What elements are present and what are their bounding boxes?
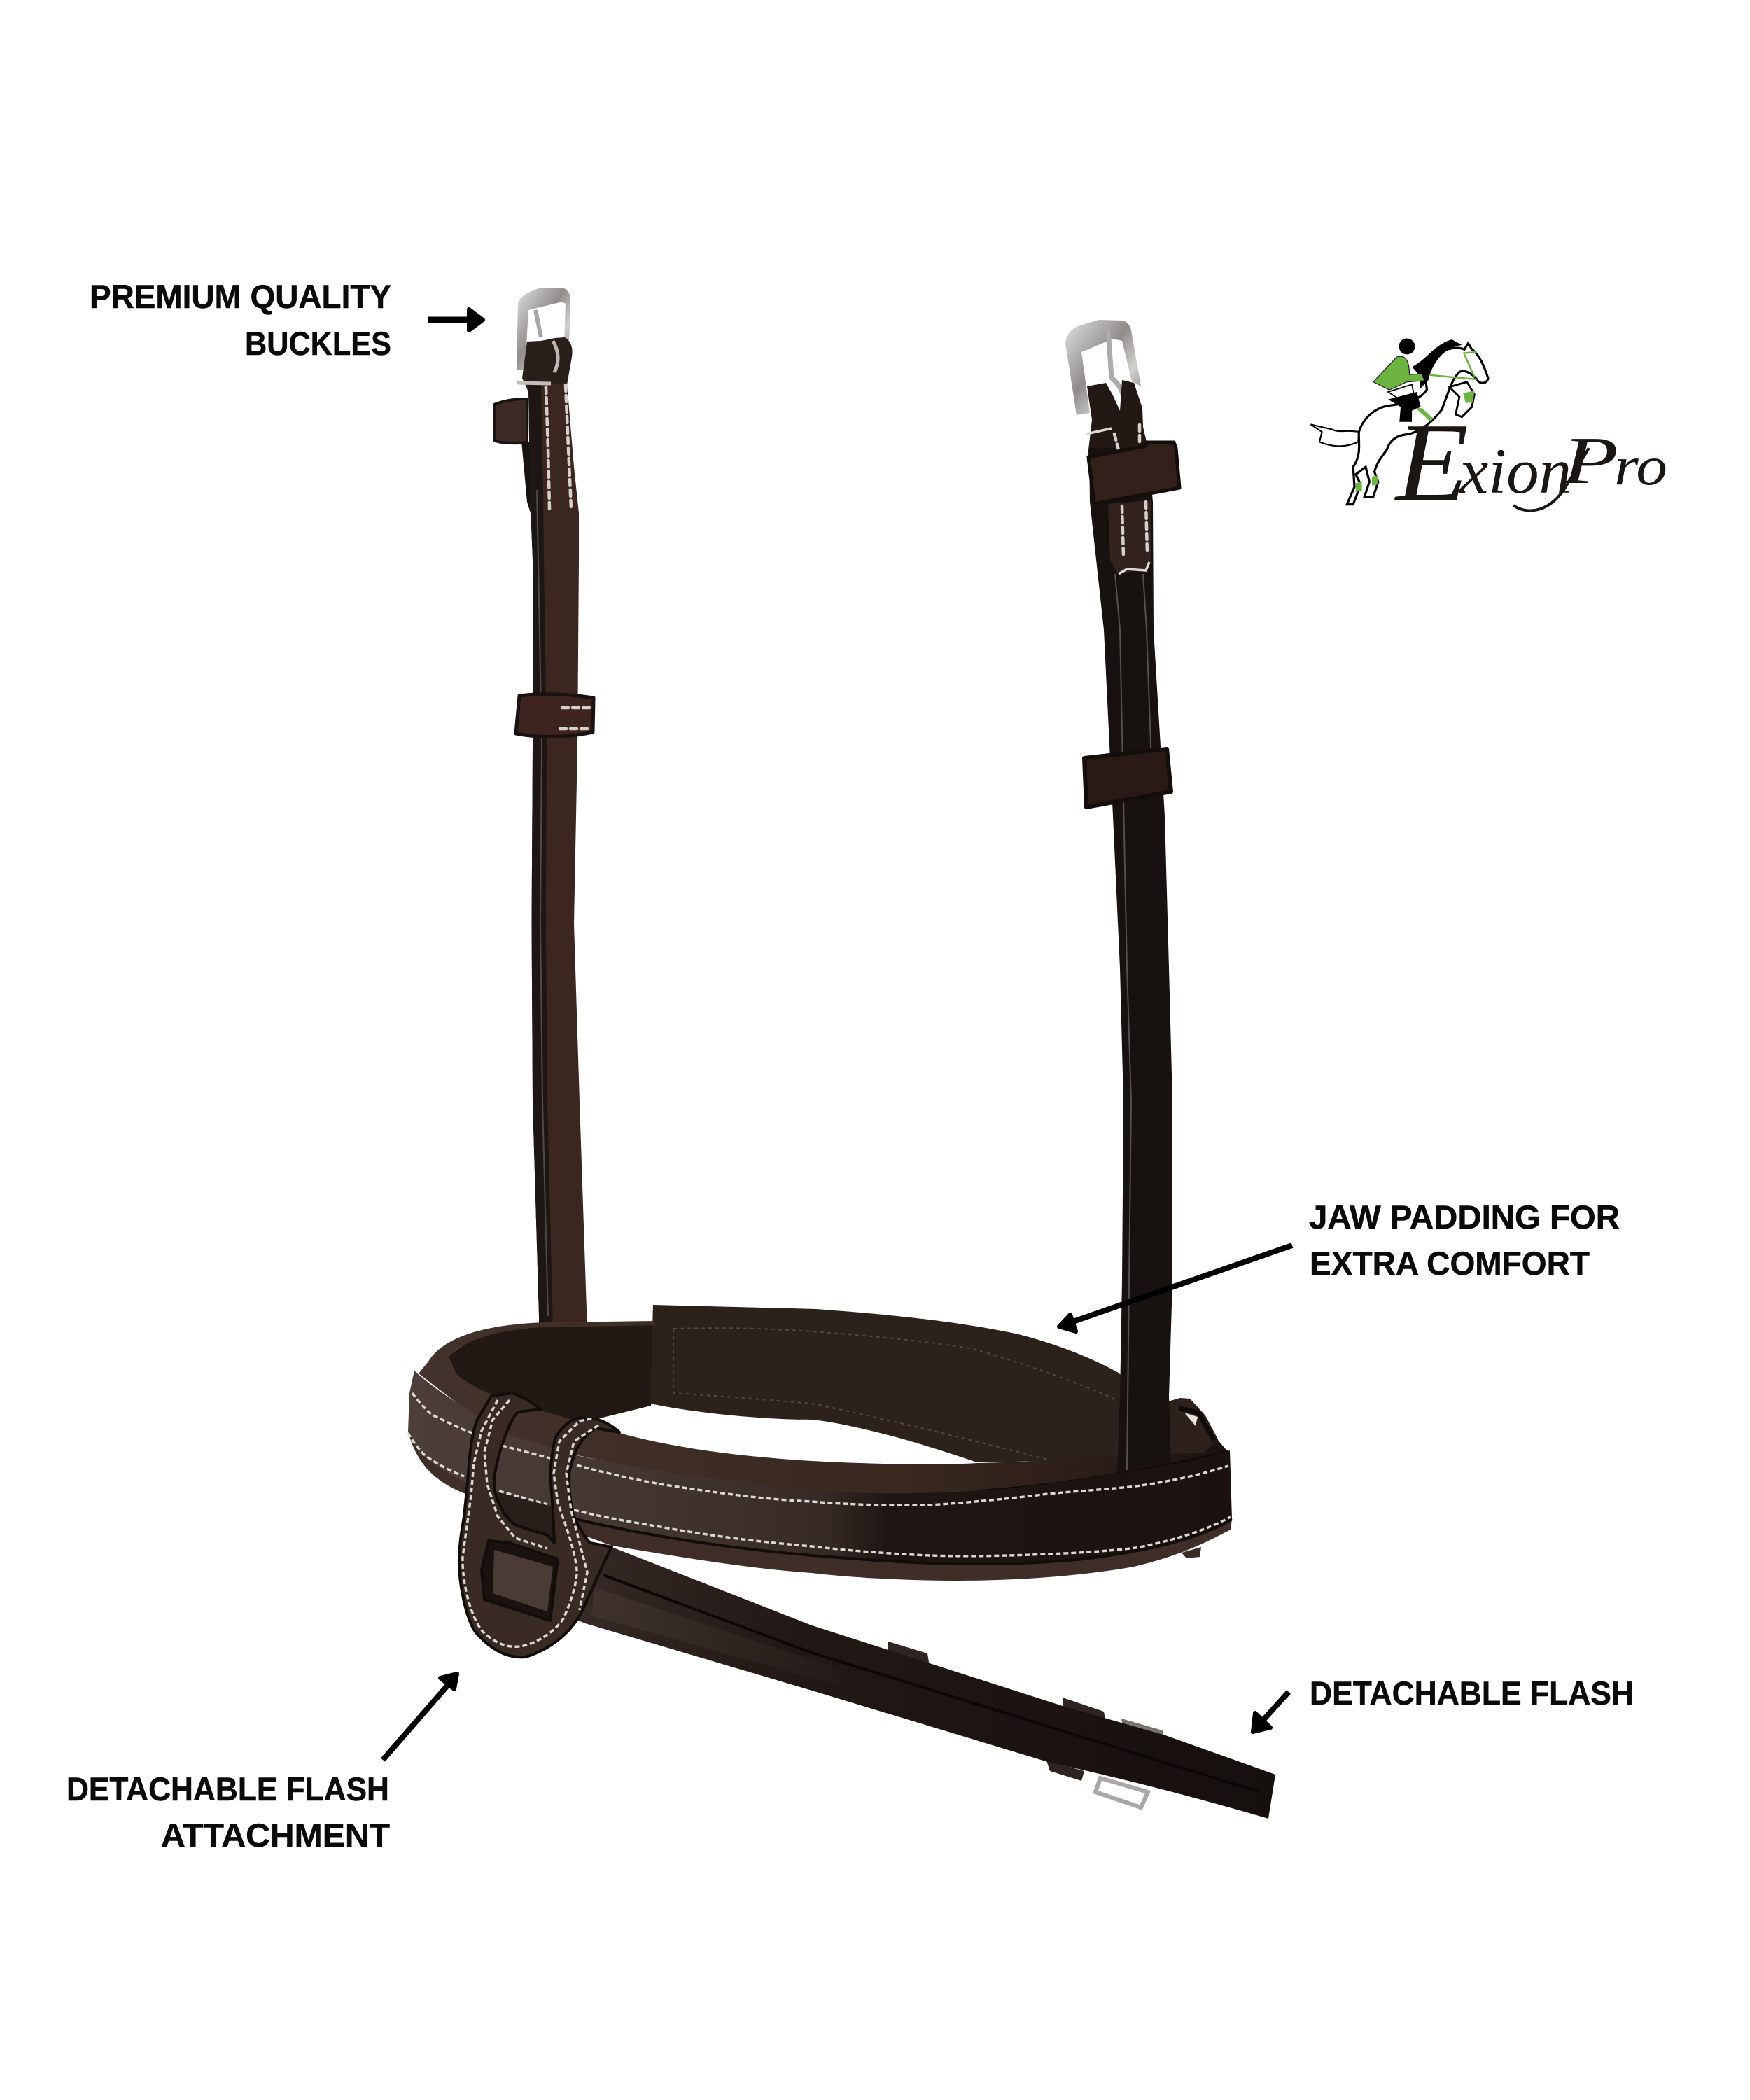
arrow: to flash attachment <box>383 1674 457 1760</box>
outer stitch <box>463 1400 593 1646</box>
buckle frame <box>1065 320 1141 415</box>
buckle pin <box>1108 329 1124 411</box>
label: detachable flash attachment: ATTACHMENT <box>161 1816 390 1854</box>
saddle and boot <box>1388 392 1421 422</box>
strap loop <box>1087 380 1148 462</box>
dark slot backing <box>476 1536 564 1628</box>
front legs <box>1450 382 1474 417</box>
wordmark swash <box>1513 448 1589 511</box>
buckle frame <box>517 288 570 370</box>
label: detachable flash: DETACHABLE FLASH <box>1310 1674 1634 1712</box>
lower edge line <box>546 1512 1232 1564</box>
mane <box>1412 340 1462 389</box>
horse and rider <box>1310 339 1488 505</box>
inner stitch left <box>484 1400 547 1548</box>
upper stitching <box>412 1393 1228 1505</box>
strap edge lines <box>1115 574 1152 1470</box>
flash keepers <box>888 1642 1106 1781</box>
strap tip brown <box>1108 500 1152 574</box>
jaw pad <box>650 1305 1183 1462</box>
P: P <box>1562 423 1618 498</box>
E: E <box>1394 400 1469 524</box>
label: jaw padding <box>1309 1198 1620 1282</box>
flap behind strap <box>522 441 531 513</box>
hardware edge <box>1180 1408 1214 1441</box>
strap body <box>553 1536 1275 1819</box>
lower keeper <box>1084 749 1171 807</box>
label: detachable flash attachment: DETACHABLE FLASH <box>66 1770 389 1807</box>
bottom tab <box>1182 1547 1201 1558</box>
label: detachable flash attachment <box>66 1770 390 1854</box>
rim patch left <box>419 1354 507 1442</box>
rim shadow line at right <box>980 1452 1228 1492</box>
leg wraps <box>1356 391 1474 492</box>
ro: ro <box>1614 435 1667 496</box>
front band <box>408 1371 1232 1581</box>
upper keeper <box>494 399 527 443</box>
flash attachment loop <box>459 1393 620 1657</box>
logo <box>1310 339 1667 524</box>
brand wordmark <box>1394 400 1667 524</box>
strap body <box>528 383 587 1330</box>
keeper stitches <box>560 708 592 729</box>
strap inside slot <box>493 1550 553 1611</box>
girth <box>1415 408 1433 422</box>
label: jaw padding: JAW PADDING FOR <box>1309 1198 1620 1236</box>
upper rim <box>421 1321 1230 1512</box>
inner suede left <box>441 1323 654 1428</box>
flash buckle upper <box>1121 1718 1166 1743</box>
xion: xion <box>1458 435 1572 507</box>
label: jaw padding: EXTRA COMFORT <box>1310 1245 1590 1282</box>
hardware white tip <box>1184 1413 1198 1426</box>
inner stitch right <box>566 1425 598 1610</box>
end stitch <box>1086 428 1149 574</box>
right cheek strap <box>1065 320 1180 1476</box>
label: premium quality buckles <box>90 278 391 362</box>
lower rim <box>408 1432 1232 1581</box>
pad seam <box>673 1328 1115 1460</box>
shadow behind loop hole <box>493 1491 560 1550</box>
jacket <box>1373 356 1424 390</box>
arrow: to buckle <box>428 309 483 330</box>
jaw padding and rear of band <box>419 1305 1230 1512</box>
label: premium quality buckles: PREMIUM QUALITY <box>90 278 391 315</box>
lower stitching <box>408 1433 1231 1556</box>
bridle <box>1429 352 1477 379</box>
flash buckle lower <box>1096 1778 1148 1807</box>
label: premium quality buckles: BUCKLES <box>245 325 391 362</box>
strap edge highlight <box>537 490 548 1316</box>
tail <box>1310 424 1359 446</box>
main leather band <box>408 1371 1232 1564</box>
arrow: to flash <box>1253 1692 1289 1732</box>
lower keeper <box>516 694 594 737</box>
buckle pin <box>536 310 541 337</box>
flash strap <box>553 1536 1275 1819</box>
strap dark edge <box>528 385 553 1330</box>
hardware at right side <box>1166 1398 1222 1466</box>
strap loop at buckle <box>522 337 573 392</box>
strap stitching <box>546 385 571 509</box>
upper keeper <box>1088 442 1180 504</box>
horse body <box>1347 343 1488 505</box>
strap stitching <box>1114 425 1147 558</box>
loop pin <box>553 341 558 372</box>
arrow: to jaw padding <box>1059 1245 1292 1331</box>
left cheek strap <box>494 288 594 1330</box>
edge lines <box>603 1575 1260 1792</box>
helmet <box>1399 339 1415 354</box>
strap body <box>1089 448 1172 1476</box>
loop leather <box>459 1393 620 1657</box>
buckle bar <box>517 383 551 384</box>
rider leg <box>1388 384 1415 402</box>
leather sheen <box>592 1588 840 1686</box>
